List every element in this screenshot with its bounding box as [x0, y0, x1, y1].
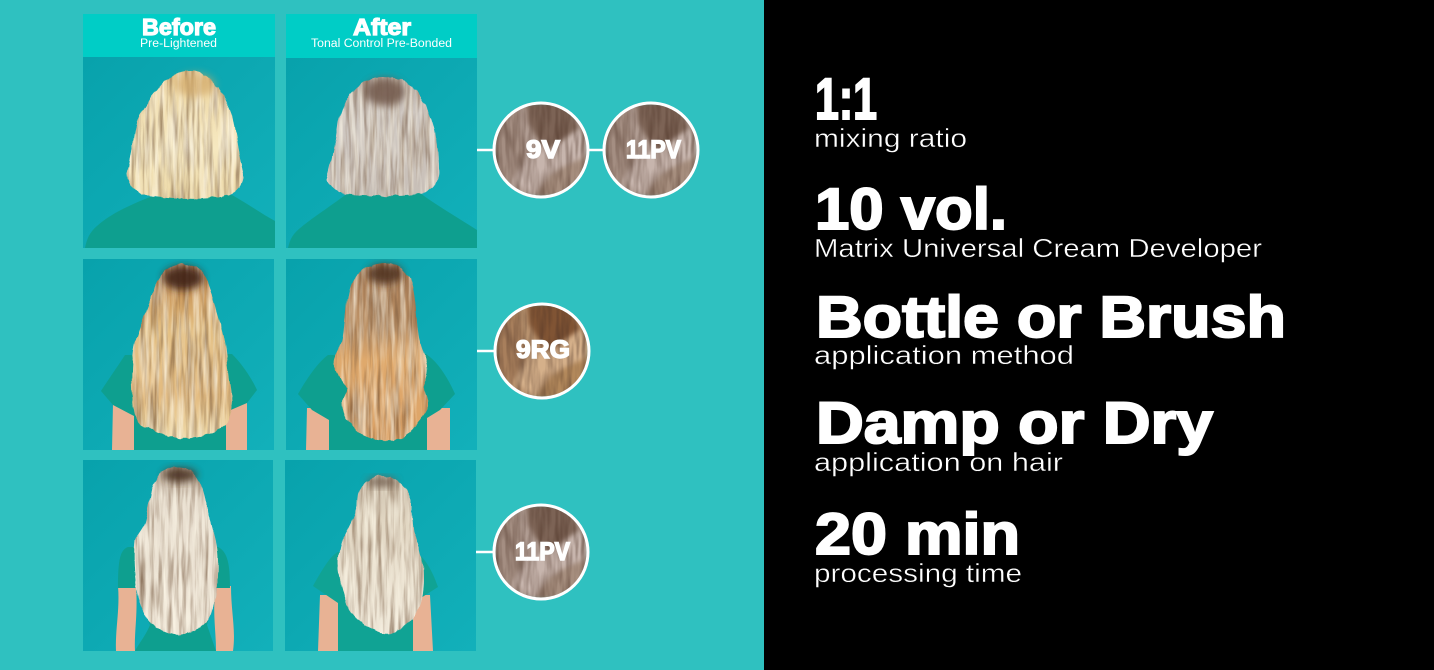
root shade: after long hair	[367, 264, 403, 284]
spec: application method: application method	[814, 340, 1074, 370]
swatch: 9RG	[494, 303, 590, 399]
spec: application method	[814, 285, 1286, 370]
swatch label: 9RG: 9RG	[516, 336, 570, 364]
after column header: After	[353, 14, 411, 40]
after column header	[286, 14, 477, 58]
swatch label: 11PV row 3: 11PV	[515, 538, 570, 566]
spec: developer volume: 10 vol.	[815, 177, 1007, 242]
spec: application method: Bottle or Brush	[816, 285, 1286, 350]
photo: before short hair	[83, 57, 275, 248]
before column header: Before	[142, 14, 216, 40]
spec: processing time	[814, 502, 1022, 588]
spec: application on hair: application on hair	[814, 447, 1063, 477]
teal background panel	[0, 0, 764, 670]
spec: developer volume	[814, 177, 1262, 263]
after column header: Tonal Control Pre-Bonded	[311, 38, 452, 50]
root shade: after short hair	[365, 78, 405, 106]
root shade: after blonde hair	[367, 477, 397, 487]
swatch: 11PV row 3	[493, 504, 589, 600]
spec: developer volume: Matrix Universal Cream Developer	[814, 233, 1262, 263]
photo: after short hair	[286, 58, 477, 248]
root shade: before blonde hair	[163, 468, 197, 482]
black background panel	[764, 0, 1434, 670]
spec: processing time: 20 min	[815, 502, 1020, 567]
swatch label: 9V: 9V	[526, 136, 560, 164]
spec: mixing ratio: 1:1	[815, 67, 877, 132]
swatch: 9V	[493, 102, 589, 198]
photo: after blonde wavy hair	[285, 460, 476, 651]
photo: after long hair	[286, 259, 477, 450]
spec: application on hair	[814, 391, 1213, 477]
crown shade: before short hair	[175, 73, 215, 97]
spec: processing time: processing time	[814, 558, 1022, 588]
before column header: Pre-Lightened	[140, 38, 217, 50]
connector line: row 3	[476, 551, 495, 553]
swatch: 11PV	[603, 102, 699, 198]
connector line: between swatches	[588, 149, 605, 151]
spec: application on hair: Damp or Dry	[816, 391, 1213, 456]
spec: mixing ratio: mixing ratio	[814, 123, 967, 153]
before column header	[83, 14, 275, 57]
connector line: row 1	[477, 149, 496, 151]
swatch label: 11PV: 11PV	[626, 136, 681, 164]
photo: before blonde straight hair	[83, 460, 273, 651]
root shade: before long hair	[163, 266, 203, 290]
spec: mixing ratio	[814, 67, 967, 153]
photo: before long hair	[83, 259, 274, 450]
connector line: row 2	[477, 350, 496, 352]
